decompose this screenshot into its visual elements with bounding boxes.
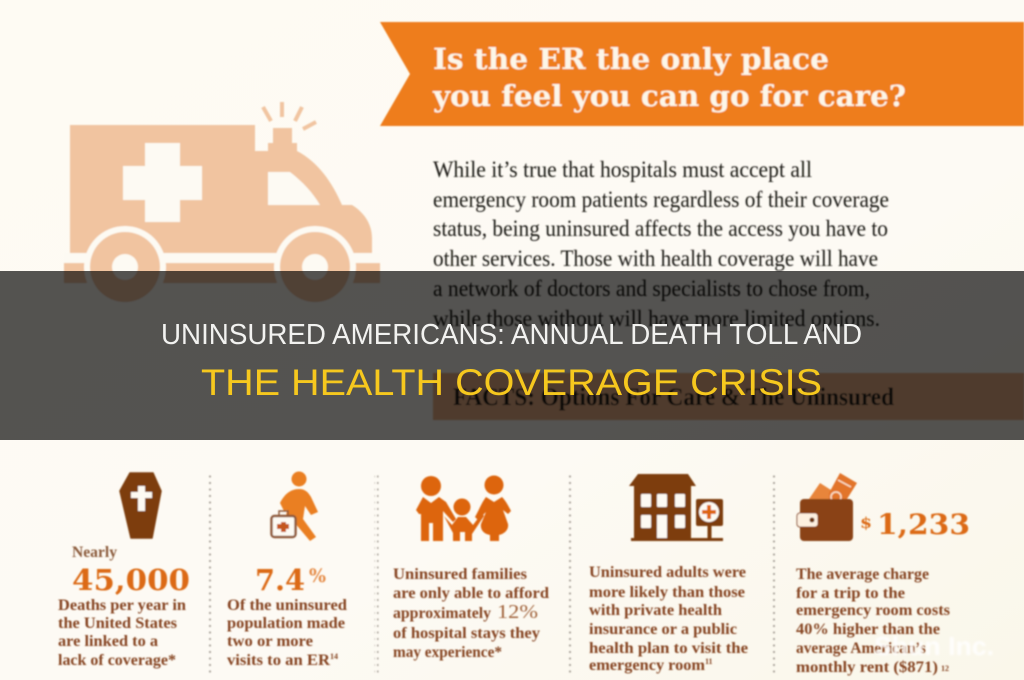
watermark: Shun Inc. [874, 631, 994, 661]
stat: deaths per year: lack of coverage* [58, 652, 176, 669]
banner: ER question [380, 22, 1024, 126]
stat: uninsured adults ER use: Uninsured adults were [589, 564, 746, 581]
stat: ER trip cost: emergency room costs [796, 602, 950, 619]
icon: person with medical bag [272, 472, 318, 541]
stat: family affordability: are only able to afford [393, 585, 549, 602]
stat: ER trip cost [796, 473, 970, 676]
stat: ER trip cost: average American’s [796, 640, 926, 657]
icon: hospital building [629, 474, 723, 541]
text block: ER explanation: emergency room patients regardless of their coverage [433, 187, 889, 212]
stat: uninsured adults ER use: insurance or a public [589, 621, 737, 638]
stat: deaths per year: the United States [58, 615, 177, 632]
stat: uninsured adults ER use: more likely than those [589, 584, 745, 601]
icon: coffin [120, 473, 161, 538]
stat: ER trip cost: 40% higher than the [796, 621, 940, 638]
stat: ER trip cost: 12 [941, 664, 949, 673]
stat: uninsured adults ER use: with private health [589, 602, 722, 619]
band: facts heading: FACTS: Options For Care & The Uninsured [453, 384, 894, 411]
figure: $1,233: 1,233 [877, 508, 970, 541]
stat: deaths per year: 45,000 [72, 563, 190, 597]
stat: uninsured adults ER use [589, 474, 748, 674]
text block: ER explanation [433, 157, 889, 331]
text block: ER explanation: other services. Those with health coverage will have [433, 246, 878, 271]
stat: family affordability: Uninsured families [393, 566, 527, 583]
heading: Is the ER the only place [433, 42, 829, 76]
stat: family affordability [393, 476, 549, 661]
stat: family affordability: 12% [497, 601, 538, 623]
title line 2: THE HEALTH COVERAGE CRISIS [201, 362, 822, 403]
stat: family affordability: may experience* [393, 644, 502, 661]
icon: ambulance [64, 102, 380, 308]
text block: ER explanation: status, being uninsured affects the access you have to [433, 216, 888, 241]
text block: ER explanation: a network of doctors and specialists to chose from, [433, 276, 870, 301]
icon: wallet with bills [797, 473, 857, 541]
heading: you feel you can go for care? [432, 79, 906, 113]
stat: repeat ER visits: two or more [227, 633, 313, 650]
stat: repeat ER visits: Of the uninsured [227, 597, 347, 614]
stat: deaths per year: Nearly [72, 544, 117, 561]
stat: deaths per year [58, 473, 190, 669]
text block: ER explanation: while those without will have more limited options. [433, 306, 880, 331]
figure: $1,233: $ [860, 514, 872, 532]
stat: repeat ER visits: 14 [330, 652, 338, 661]
stat: family affordability: of hospital stays they [393, 625, 540, 642]
icon: family [416, 476, 511, 541]
title overlay band [0, 271, 1024, 440]
stat: family affordability: approximately [393, 605, 491, 622]
title line 1: UNINSURED AMERICANS: ANNUAL DEATH TOLL AND [161, 319, 862, 351]
stat: ER trip cost: The average charge [796, 566, 929, 583]
stat: repeat ER visits: % [309, 565, 326, 587]
stat: repeat ER visits: 7.4 [255, 563, 305, 597]
text block: ER explanation: While it’s true that hospitals must accept all [433, 157, 812, 182]
stat: uninsured adults ER use: emergency room [589, 657, 705, 674]
stat: repeat ER visits: population made [227, 615, 345, 632]
stat: repeat ER visits [227, 472, 347, 669]
stat: deaths per year: are linked to a [58, 633, 158, 650]
stat: deaths per year: Deaths per year in [58, 597, 186, 614]
stat: repeat ER visits: visits to an ER [227, 652, 331, 669]
band: facts heading [433, 373, 1024, 420]
stat: ER trip cost: monthly rent ($871) [796, 659, 938, 676]
stat: ER trip cost: for a trip to the [796, 585, 905, 602]
stat: uninsured adults ER use: health plan to visit the [589, 640, 748, 657]
stat: uninsured adults ER use: 11 [705, 657, 713, 666]
